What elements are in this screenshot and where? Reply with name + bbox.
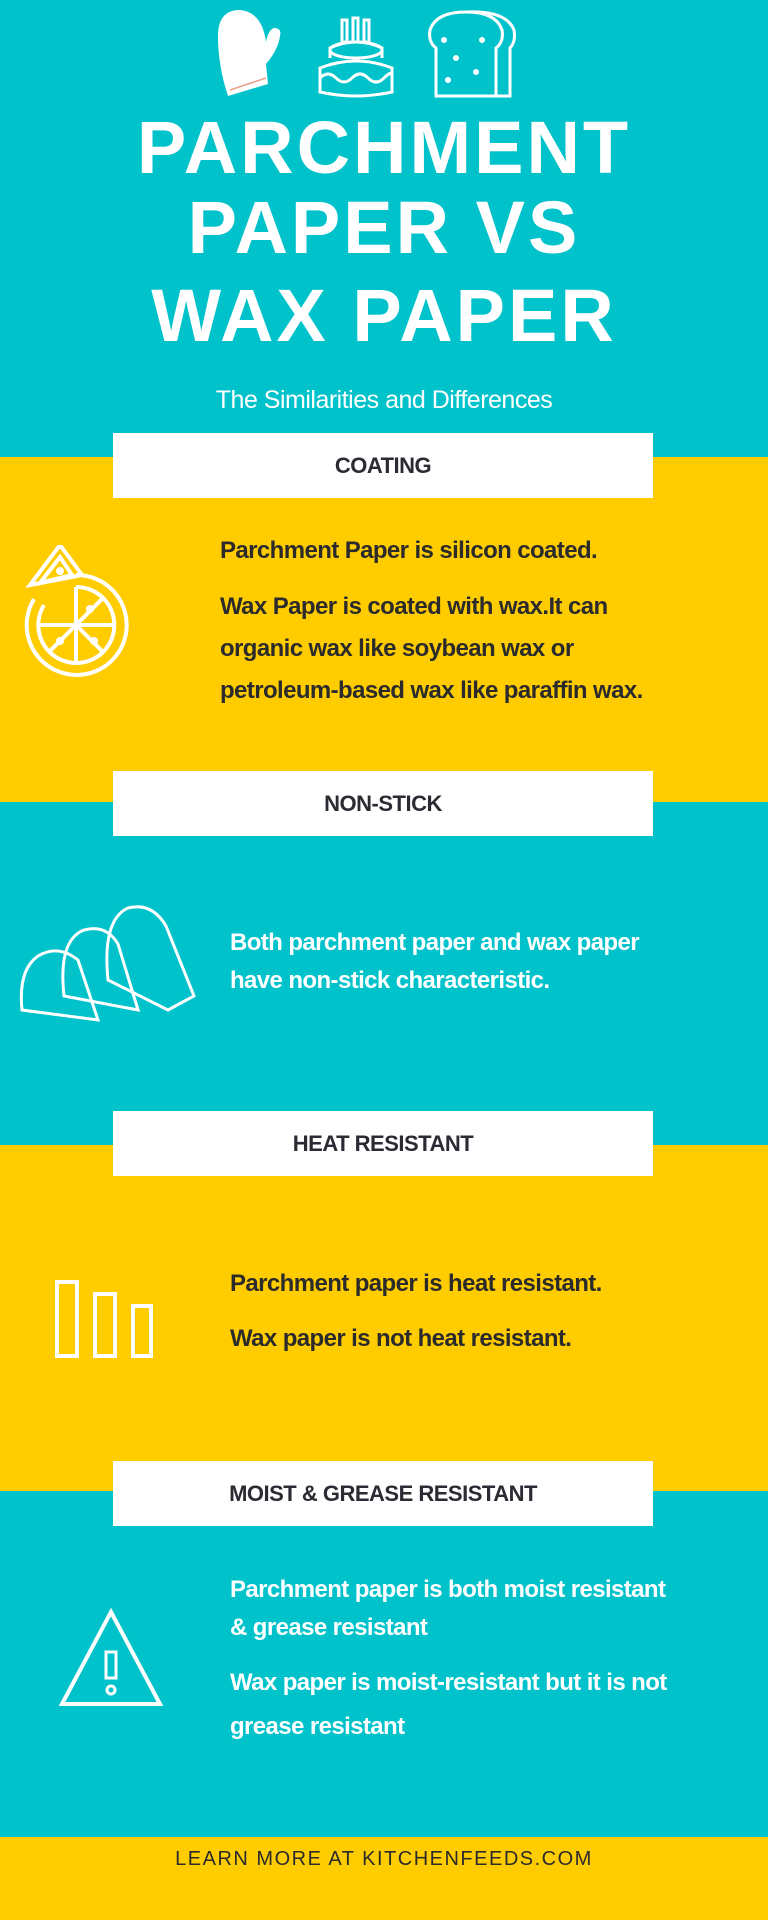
heading: coating: COATING: [335, 452, 431, 478]
text: moist: Parchment paper is both moist resistant: [230, 1576, 665, 1603]
icon: cake: [318, 16, 394, 98]
text: heat: Parchment paper is heat resistant.: [230, 1270, 602, 1297]
icon: bread slices: [20, 905, 196, 1022]
band: header teal: [0, 0, 768, 457]
text: non-stick: have non-stick characteristic.: [230, 967, 549, 994]
heading: heat resistant: HEAT RESISTANT: [293, 1130, 473, 1156]
title: WAX PAPER: [151, 274, 617, 357]
heading: coating: [113, 433, 653, 498]
heading: non-stick: [113, 771, 653, 836]
heading: moist & grease: [113, 1461, 653, 1526]
text: moist: [230, 1576, 666, 1641]
heading: non-stick: NON-STICK: [324, 790, 442, 816]
subtitle: The Similarities and Differences: [216, 386, 552, 414]
band: moist teal: [0, 1491, 768, 1837]
text: organic wax like soybean wax or: [220, 635, 574, 662]
text: moist: & grease resistant: [230, 1614, 427, 1641]
text: Wax paper is not heat resistant.: [230, 1325, 571, 1352]
icon: bread: [428, 10, 516, 98]
text: Wax paper is moist-resistant but it is not: [230, 1669, 667, 1696]
text: coating: Parchment Paper is silicon coated.: [220, 537, 597, 564]
icon: pizza: [24, 545, 129, 677]
heading: heat resistant: [113, 1111, 653, 1176]
icon: oven mitt: [218, 10, 280, 96]
text: non-stick: Both parchment paper and wax paper: [230, 929, 639, 956]
heading: moist & grease: MOIST & GREASE RESISTANT: [229, 1480, 537, 1506]
icon: warning triangle: [58, 1608, 164, 1706]
band: non-stick teal: [0, 802, 768, 1145]
icon: bars: [55, 1280, 153, 1358]
band: coating yellow: [0, 457, 768, 802]
text: Wax Paper is coated with wax.It can: [220, 593, 608, 620]
title: [137, 106, 631, 357]
text: non-stick: [230, 929, 640, 994]
text: grease resistant: [230, 1713, 405, 1740]
band: footer yellow: [0, 1837, 768, 1920]
footer: LEARN MORE AT KITCHENFEEDS.COM: [175, 1848, 593, 1870]
text: petroleum-based wax like paraffin wax.: [220, 677, 643, 704]
title: PARCHMENT: [137, 106, 631, 189]
band: heat yellow: [0, 1145, 768, 1491]
title: PAPER VS: [188, 186, 580, 269]
